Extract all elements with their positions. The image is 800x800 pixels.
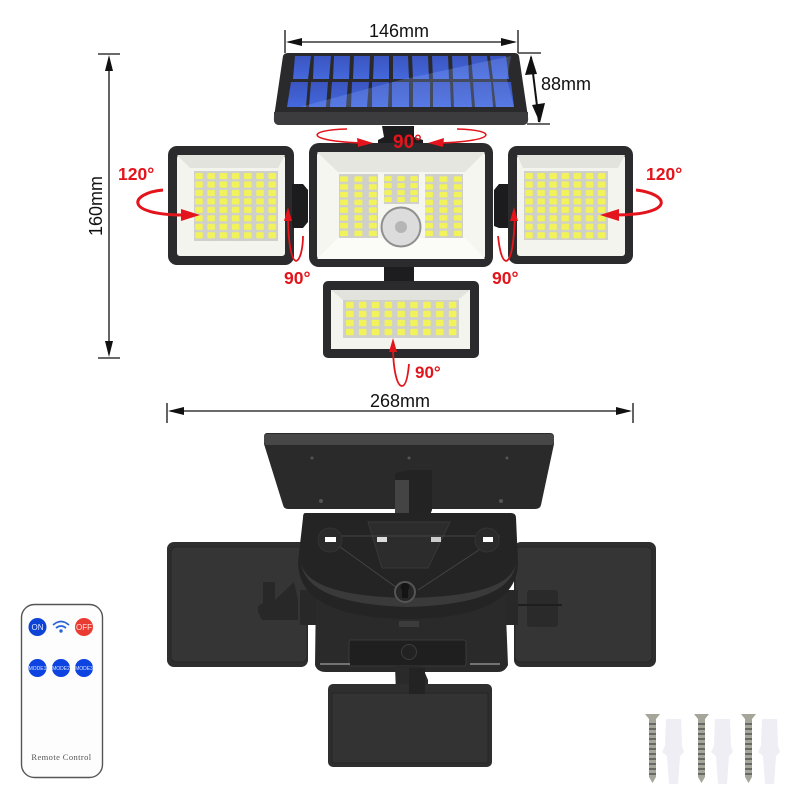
button: MODE 1	[28, 659, 47, 677]
button: OFF	[75, 618, 93, 636]
dimension: 146mm: 146mm	[369, 21, 429, 41]
rotation arrow: left 120°	[118, 164, 200, 221]
remote control	[22, 604, 102, 778]
icon: wifi	[53, 622, 69, 632]
rotation arrow: right hinge 90°: 90°	[492, 268, 518, 288]
panel screws	[310, 456, 508, 503]
button: MODE 3: MODE3	[75, 666, 93, 672]
solar cells	[287, 56, 514, 107]
rotation arrow: left hinge 90°	[284, 207, 310, 288]
button: ON	[28, 618, 46, 636]
dimension: 160mm: 160mm	[86, 176, 106, 236]
rotation arrow: right 120°	[600, 164, 682, 221]
rotation arrow: left 120°: 120°	[118, 164, 154, 184]
button: MODE 2: MODE2	[52, 666, 70, 672]
dimension: 88mm: 88mm	[541, 74, 591, 94]
rotation arrow: right 120°: 120°	[646, 164, 682, 184]
button: MODE 3	[75, 659, 93, 677]
back view: left bracket	[258, 582, 298, 620]
screw set 3	[741, 714, 780, 784]
right hinge	[494, 184, 509, 228]
rotation arrow: bottom lamp 90°	[389, 338, 441, 386]
screw set 1	[645, 714, 684, 784]
button: ON: ON	[32, 623, 44, 632]
solar panel front	[274, 53, 528, 125]
left hinge	[292, 184, 308, 228]
left lamp	[168, 146, 294, 265]
back view: left panel	[167, 542, 308, 667]
dimension: 88mm	[518, 53, 591, 124]
back view: right panel	[514, 542, 656, 667]
button: OFF: OFF	[76, 623, 92, 632]
remote label: Remote Control	[31, 752, 92, 762]
screw set 2	[694, 714, 733, 784]
right lamp	[508, 146, 633, 264]
bottom lamp mount	[384, 267, 414, 282]
back view: mounting plate	[298, 513, 518, 619]
rotation arrow: solar 90°: 90°	[393, 132, 422, 153]
rotation arrow: right hinge 90°	[492, 207, 518, 288]
dimension: 268mm	[167, 391, 633, 423]
dimension: 160mm	[86, 54, 120, 358]
rotation arrow: bottom lamp 90°: 90°	[415, 363, 441, 382]
button: MODE 1: MODE1	[29, 666, 47, 672]
rotation arrow: solar 90°	[317, 129, 486, 153]
back view: bottom arm	[395, 666, 428, 693]
centre lamp	[309, 143, 493, 267]
back view: solar panel	[264, 433, 554, 515]
back view: lower body	[300, 590, 518, 672]
back view: bottom panel	[328, 668, 492, 767]
button: MODE 2	[52, 659, 70, 677]
solar panel mount	[378, 126, 423, 146]
dimension: 146mm	[285, 21, 518, 53]
motion sensor	[380, 206, 422, 248]
back view: right bracket	[512, 590, 562, 627]
bottom lamp	[323, 281, 479, 358]
dimension: 268mm: 268mm	[370, 391, 430, 411]
rotation arrow: left hinge 90°: 90°	[284, 268, 310, 288]
